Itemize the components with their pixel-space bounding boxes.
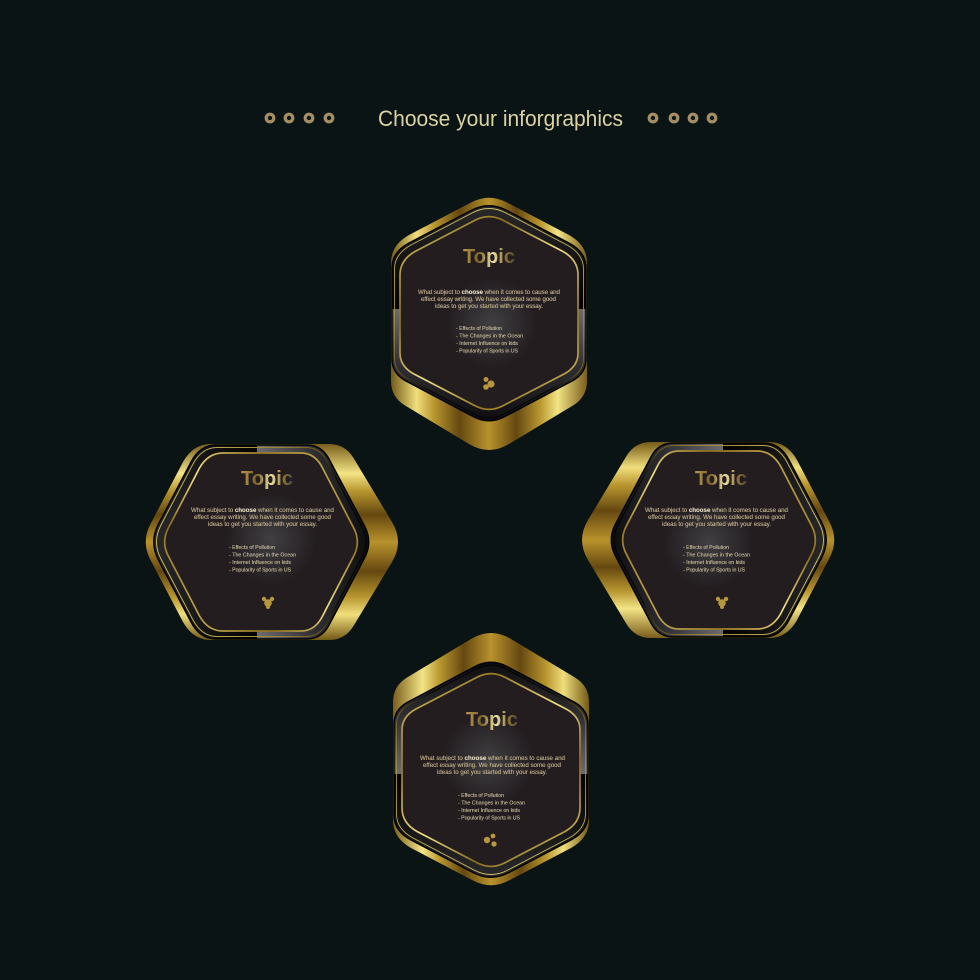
topic list: - Popularity of Sports in US [229,568,292,574]
description text: What subject to choose when it comes to cause and [645,507,789,514]
panel: right hexagon badge [582,442,834,638]
topic list [458,793,525,822]
topic list: - Internet Influence on kids [683,560,745,566]
header [266,106,716,131]
icon: gold cluster [262,597,274,609]
description text: effect essay writing. We have collected some good [421,296,557,303]
header dots: left [266,114,333,122]
panel: left hexagon badge [146,444,398,640]
description text: ideas to get you started with your essay. [435,303,543,310]
gold hexagon frame [391,198,587,450]
topic list: - Popularity of Sports in US [456,348,519,354]
title: Choose your inforgraphics [378,106,623,131]
icon: gold cluster [716,597,728,609]
topic list: - The Changes in the Ocean [229,552,296,558]
description text [191,507,335,528]
topic list: - The Changes in the Ocean [683,552,750,558]
topic list: - The Changes in the Ocean [458,800,525,806]
topic list: - Popularity of Sports in US [458,816,521,822]
description text: What subject to choose when it comes to cause and [418,289,561,296]
description text [420,755,566,776]
heading: Topic [241,468,293,490]
topic list [683,545,750,574]
description text: What subject to choose when it comes to cause and [420,755,566,762]
topic list [229,545,296,574]
description text [645,507,789,528]
header dots: right [649,114,716,122]
topic list: - Internet Influence on kids [458,808,520,814]
topic list: - Internet Influence on kids [456,341,518,347]
topic list: - Effects of Pollution [683,545,729,551]
icon: gold cluster [483,377,495,390]
icon: gold cluster [484,834,497,847]
gold hexagon frame [582,442,834,638]
heading: Topic [463,246,515,268]
heading: Topic [695,468,747,490]
description text: ideas to get you started with your essay. [208,521,317,528]
panel: bottom hexagon badge [393,633,589,885]
gold hexagon frame [393,633,589,885]
topic list: - Popularity of Sports in US [683,568,746,574]
description text: ideas to get you started with your essay. [662,521,771,528]
description text: What subject to choose when it comes to cause and [191,507,335,514]
topic list: - Effects of Pollution [229,545,275,551]
topic list: - Internet Influence on kids [229,560,291,566]
description text: ideas to get you started with your essay. [437,769,547,776]
description text: effect essay writing. We have collected some good [194,514,332,521]
topic list: - The Changes in the Ocean [456,334,523,340]
heading: Topic [466,709,518,731]
topic list: - Effects of Pollution [456,326,502,332]
topic list: - Effects of Pollution [458,793,504,799]
description text [418,289,561,310]
gold hexagon frame [146,444,398,640]
panel: top hexagon badge [391,198,587,450]
topic list [456,326,523,354]
description text: effect essay writing. We have collected some good [648,514,786,521]
description text: effect essay writing. We have collected some good [423,762,562,769]
